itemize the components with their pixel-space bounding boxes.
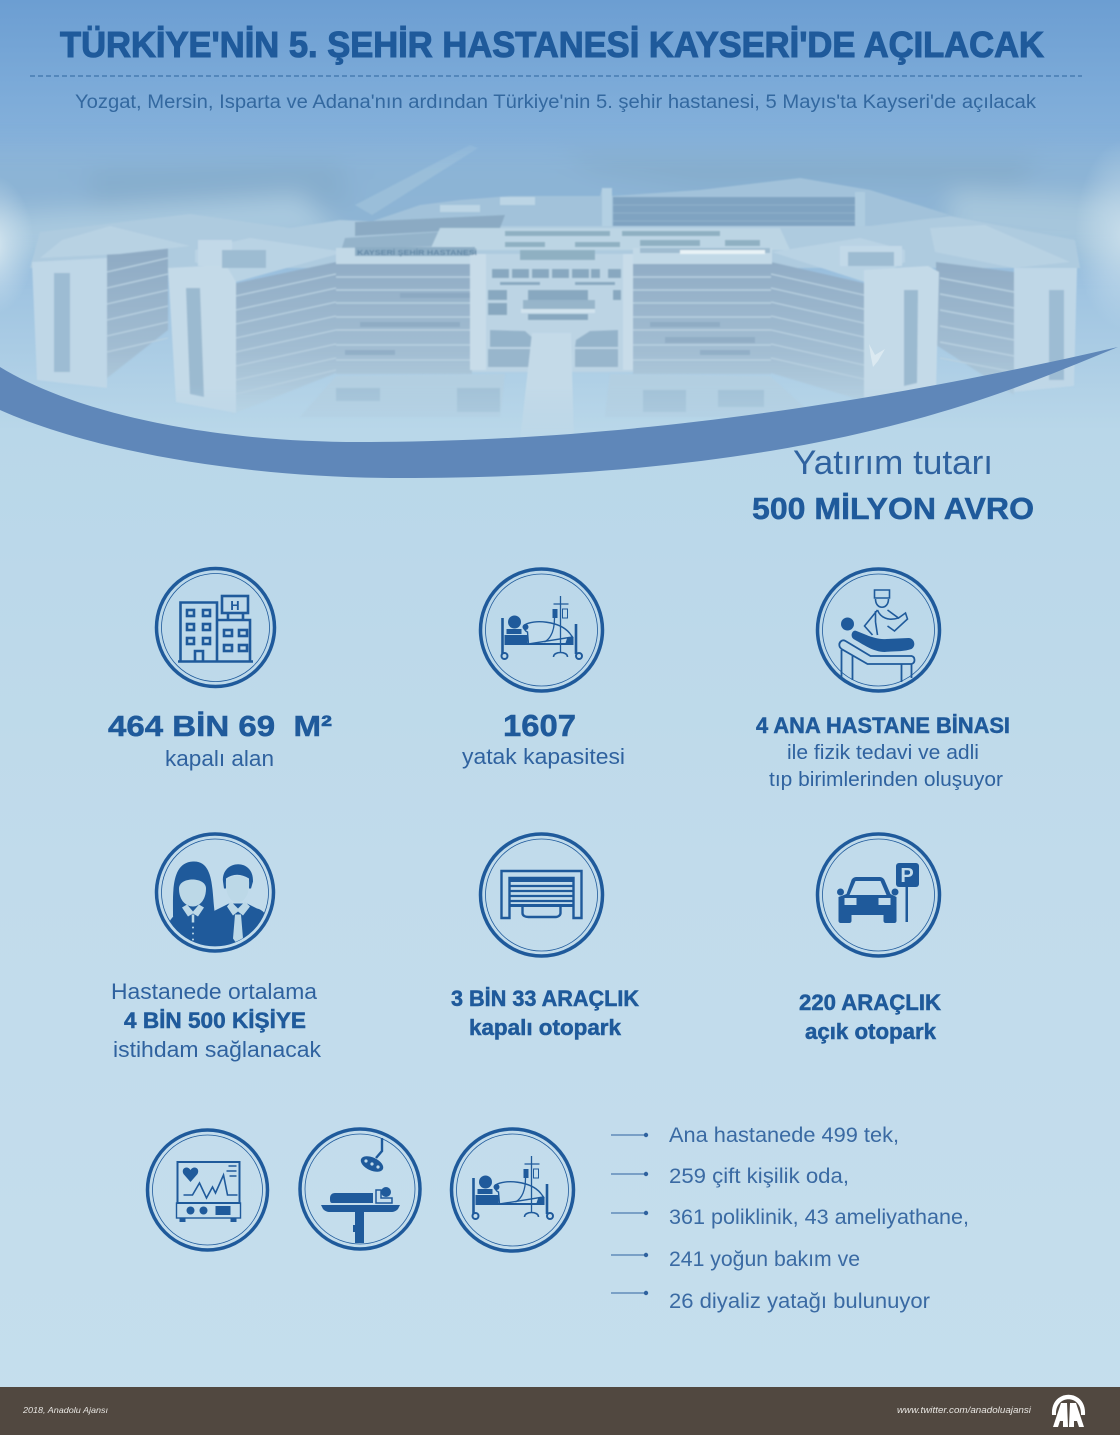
left wing centre [336,262,472,374]
panel: bed capacity [462,569,625,769]
icon: physiotherapy [818,569,940,691]
dashed divider [30,75,1082,77]
hospital photograph [11,146,1108,416]
panel: open car park [799,834,941,1044]
icon: hospital building: H [230,598,240,613]
icon: AA logo [1052,1395,1085,1427]
panel: employment: Hastanede ortalama [111,979,318,1004]
panel: closed area: 464 BİN 69 M² [108,711,332,743]
icon: bird [869,344,885,367]
panel: main buildings: ile fizik tedavi ve adli [787,742,979,764]
panel: closed car park: 3 BİN 33 ARAÇLIK [451,986,639,1011]
panel: closed area: kapalı alan [165,746,274,771]
investment callout: 500 MİLYON AVRO [752,491,1034,526]
panel: closed car park: kapalı otopark [469,1015,622,1040]
panel: employment [111,834,322,1062]
icon: operating table [300,1129,420,1249]
photo edge glow [0,140,1120,330]
panel: main buildings: 4 ANA HASTANE BİNASI [756,713,1010,738]
investment callout [752,444,1034,526]
panel: employment: 4 BİN 500 KİŞİYE [124,1008,306,1033]
panel: main buildings: tıp birimlerinden oluşuyor [769,769,1003,791]
far right tower [936,262,1014,395]
back structures [376,178,946,226]
icon: garage [480,834,602,956]
panel: main buildings [756,569,1010,791]
icon: two people [156,834,274,952]
glass shadows [345,293,755,355]
right wing centre [633,262,771,374]
list markers [611,1133,648,1295]
panel: open car park: 220 ARAÇLIK [799,990,941,1015]
icon: patient bed [452,1129,574,1251]
facilities list: 259 çift kişilik oda, [669,1165,849,1188]
front towers [168,265,236,413]
left wing diagonal [236,262,336,398]
title: TÜRKİYE'NİN 5. ŞEHİR HASTANESİ KAYSERİ'DE AÇILACAK [60,24,1044,65]
far left tower [107,244,168,378]
curved blue swoosh [0,347,1118,478]
central roof [430,228,790,250]
icon: hospital bed [480,569,602,691]
footer: www.twitter.com/anadoluajansi [897,1405,1032,1416]
icon: car and parking sign: P [900,865,914,887]
panel: open car park: açık otopark [805,1019,937,1044]
road [355,145,478,215]
facilities list: 361 poliklinik, 43 ameliyathane, [669,1206,969,1229]
subtitle: Yozgat, Mersin, Isparta ve Adana'nın ardından Türkiye'nin 5. şehir hastanesi, 5 Mayıs'ta Kayseri'de açılacak [75,92,1037,113]
icon: hospital building [156,568,274,686]
panel: bed capacity: 1607 [503,708,576,743]
central block [472,254,633,372]
footer: 2018, Anadolu Ajansı [22,1405,108,1415]
investment callout: Yatırım tutarı [793,444,993,482]
panel: employment: istihdam sağlanacak [113,1037,322,1062]
sign on roof: KAYSERİ ŞEHİR HASTANESİ [357,249,477,257]
right wing diagonal [771,262,868,402]
panel: closed area [108,568,332,771]
wing roof bands [336,246,472,264]
footer [0,1387,1120,1435]
icon: heart monitor [148,1130,268,1250]
floors [107,257,1014,378]
icon: car and parking sign [818,834,940,956]
forecourt [490,330,535,347]
facilities list: 241 yoğun bakım ve [669,1248,860,1271]
panel: bed capacity: yatak kapasitesi [462,744,625,769]
panel: closed car park [451,834,639,1040]
facilities list [611,1124,969,1313]
facilities list: Ana hastanede 499 tek, [669,1124,899,1147]
facilities list: 26 diyaliz yatağı bulunuyor [669,1290,930,1313]
